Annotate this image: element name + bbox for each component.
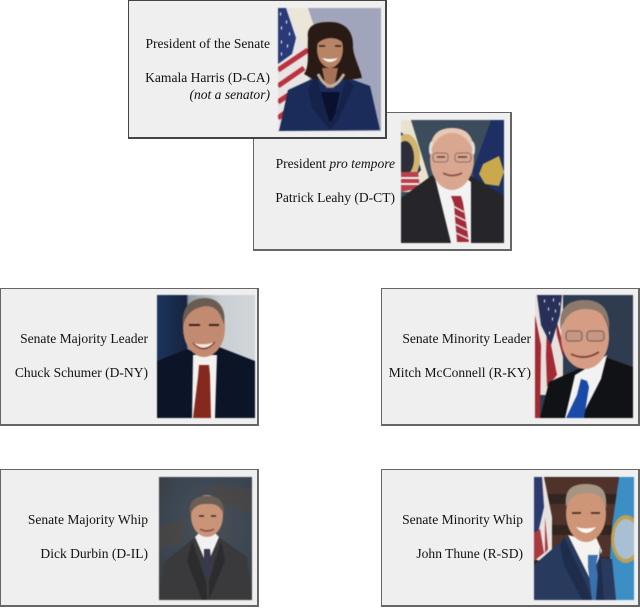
name: Kamala Harris: Kamala Harris (D-CA)	[145, 70, 270, 85]
portrait: Mitch McConnell	[534, 294, 634, 419]
name: Mitch McConnell: Mitch McConnell (R-KY)	[389, 365, 531, 380]
name: John Thune: John Thune (R-SD)	[416, 546, 523, 561]
role: President pro tempore: President pro tempore	[276, 156, 395, 171]
role: Senate Majority Whip: Senate Majority Whip	[28, 512, 148, 527]
panel: Senate Majority Whip	[0, 469, 259, 607]
role: President of the Senate: President of the Senate	[145, 36, 270, 51]
portrait: John Thune	[533, 476, 635, 601]
portrait: Kamala Harris	[277, 7, 382, 132]
role: Senate Minority Whip: Senate Minority Whip	[402, 512, 523, 527]
name: Dick Durbin: Dick Durbin (D-IL)	[40, 546, 148, 561]
panel: Senate Majority Leader	[0, 288, 259, 426]
panel: President pro tempore	[253, 112, 512, 251]
panel: President of the Senate	[128, 0, 387, 139]
name: Chuck Schumer: Chuck Schumer (D-NY)	[15, 365, 148, 380]
role: Senate Majority Leader: Senate Majority Leader	[20, 331, 148, 346]
panel: Senate Minority Whip	[381, 469, 640, 607]
role: Senate Minority Leader: Senate Minority Leader	[402, 331, 531, 346]
name: Patrick Leahy: Patrick Leahy (D-CT)	[275, 190, 395, 205]
portrait: Chuck Schumer	[156, 294, 256, 419]
note: not a senator: (not a senator)	[189, 87, 270, 102]
portrait: Dick Durbin	[158, 476, 253, 601]
panel: Senate Minority Leader	[381, 288, 640, 426]
portrait: Patrick Leahy	[400, 119, 505, 244]
